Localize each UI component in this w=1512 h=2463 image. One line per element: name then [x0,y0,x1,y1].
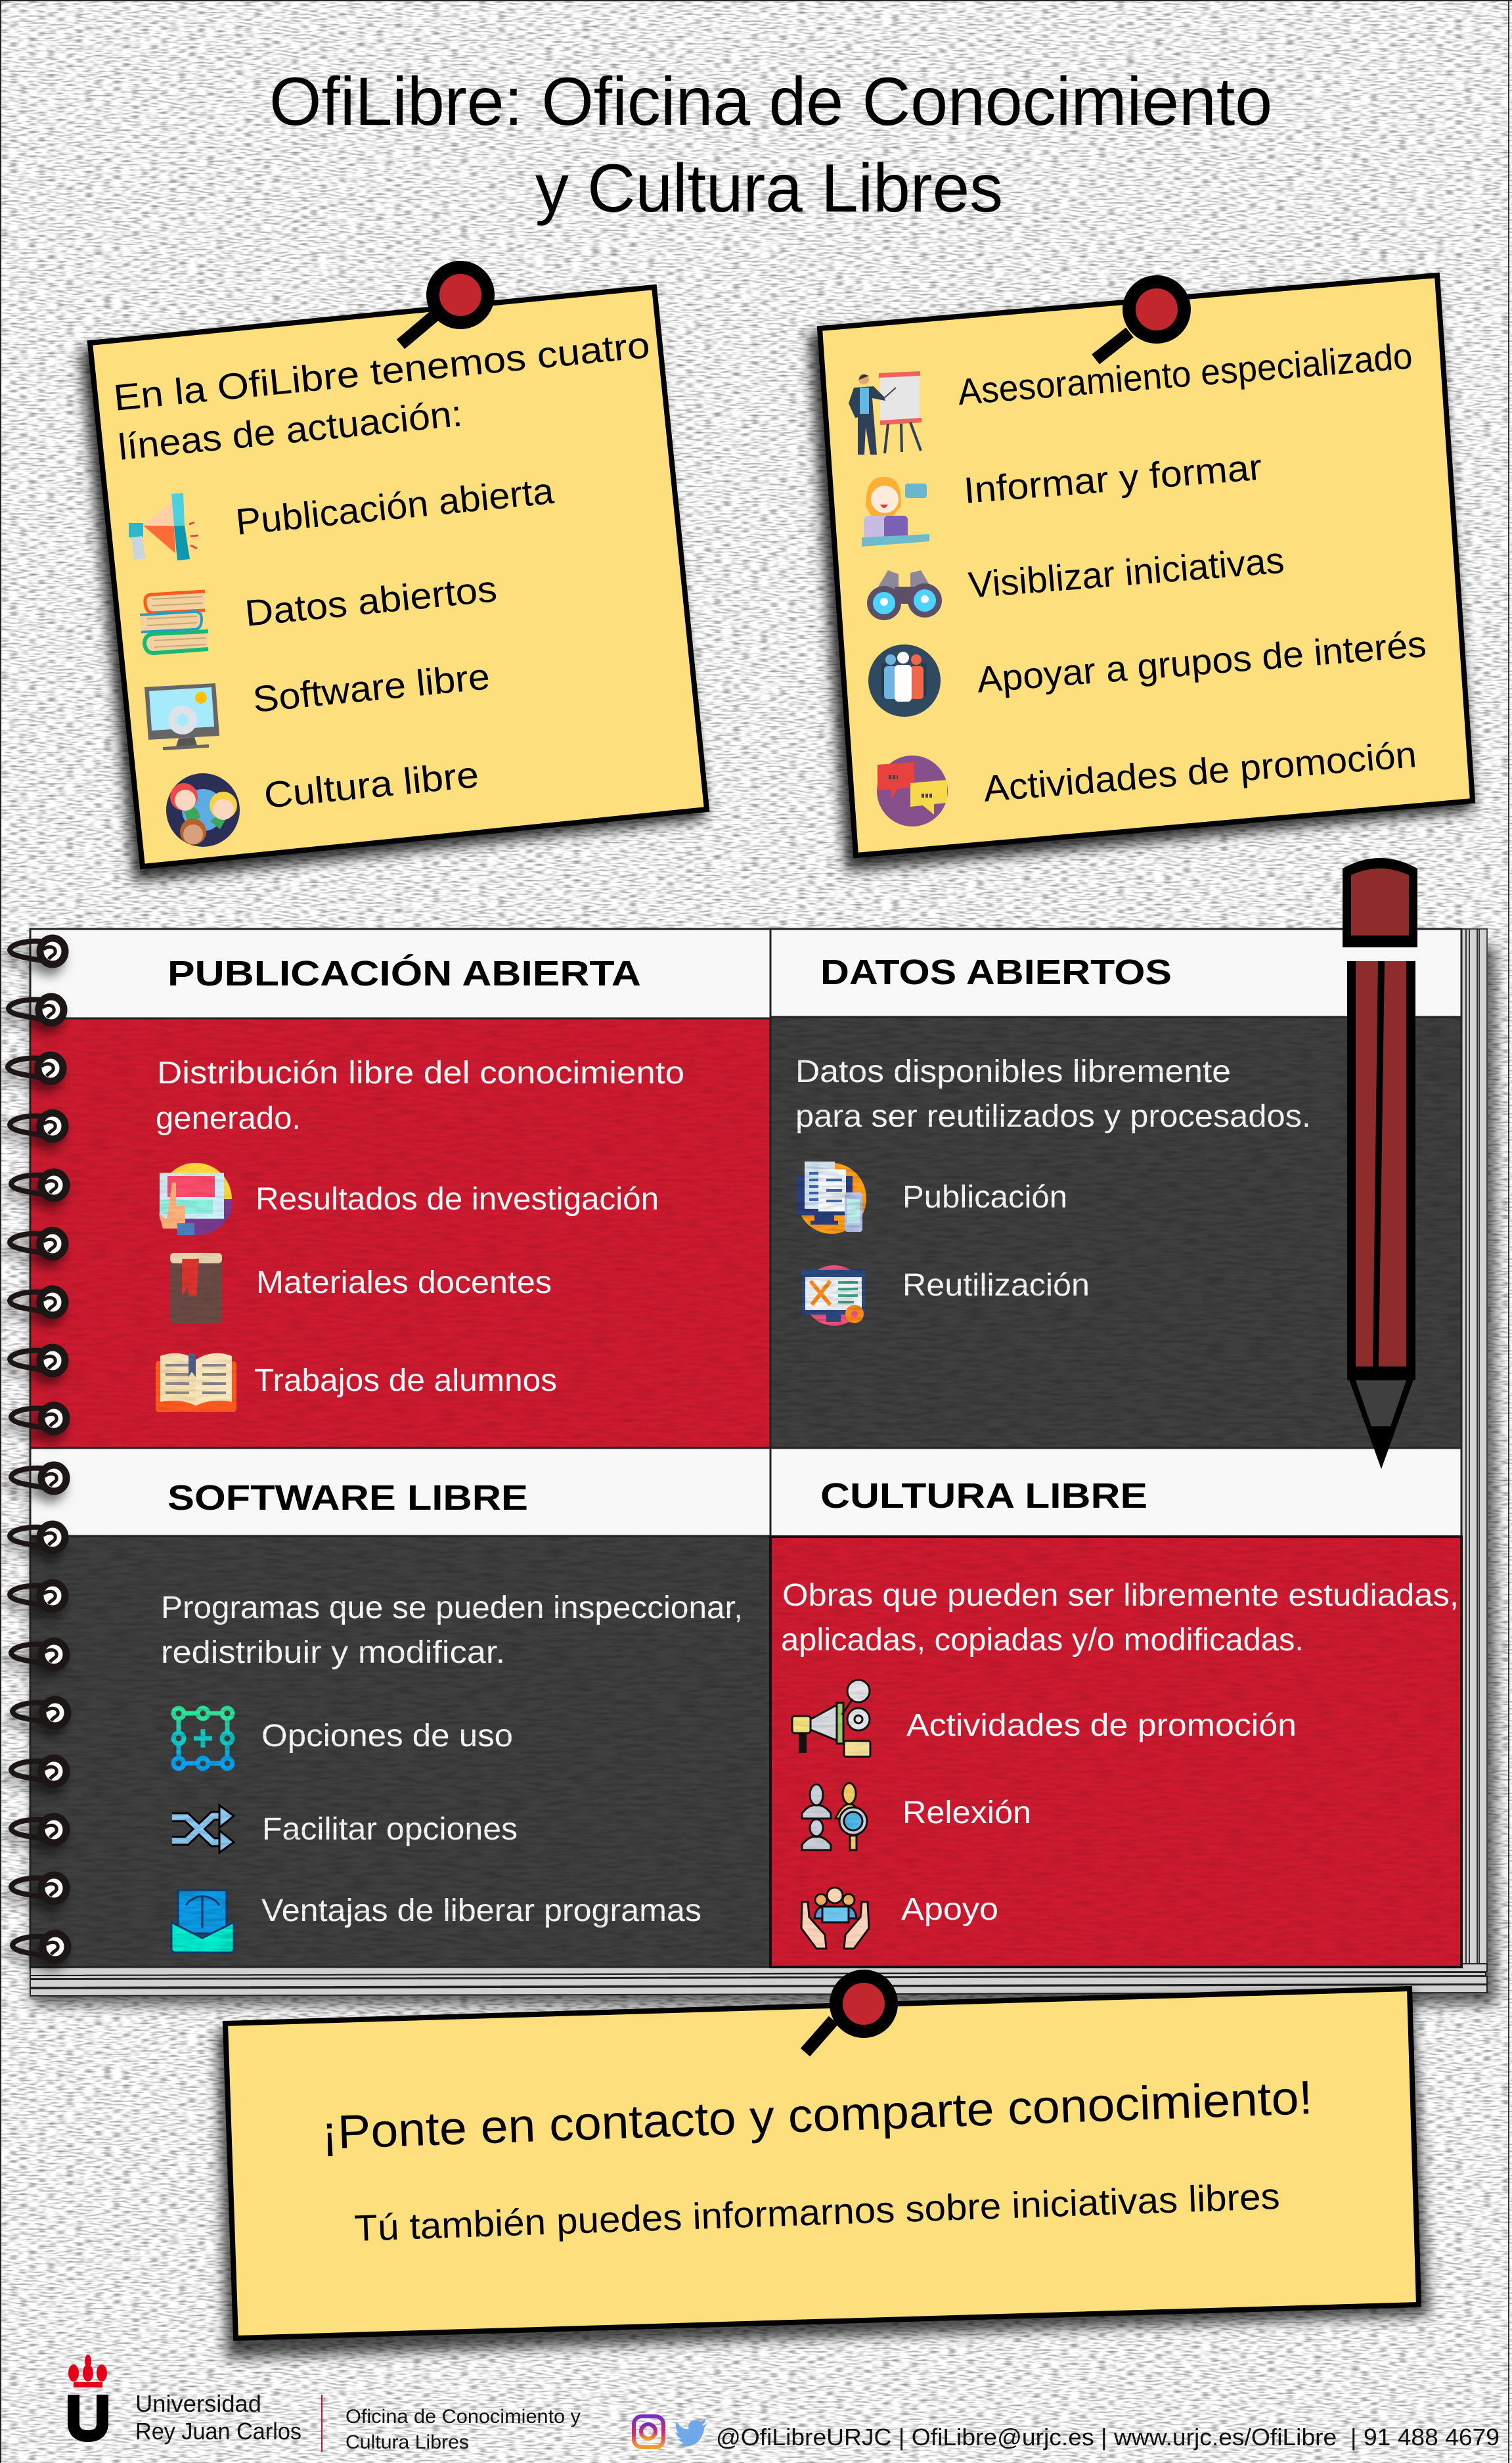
office name [345,2406,581,2453]
panel: datos abiertos [770,929,1461,1448]
note paper [225,1989,1419,2338]
icon: twitter bird [675,2419,708,2447]
note paper [820,275,1473,855]
footer divider [321,2395,322,2452]
text: apoyar: Apoyar a grupos de interés [975,623,1428,700]
text: trabajos: Trabajos de alumnos [254,1363,557,1398]
logo: Universidad Rey Juan Carlos [68,2355,107,2436]
heading: PUBLICACIÓN ABIERTA [167,954,641,993]
icon: research results [159,1163,232,1235]
text: ventajas: Ventajas de liberar programas [261,1893,701,1928]
icon: envelope design [171,1890,234,1953]
description [161,1591,743,1670]
panel: software libre [30,1448,770,1967]
description: aplicadas, copiadas y/o modificadas. [781,1623,1304,1658]
icon: open book [156,1353,236,1412]
description: Distribución libre del conocimiento [157,1056,684,1091]
icon: reuse tools [802,1265,865,1326]
red body [770,1537,1461,1967]
header band [30,1448,770,1536]
description: Programas que se pueden inspeccionar, [161,1591,743,1625]
pin [401,267,488,344]
description: generado. [156,1101,301,1136]
note paper [90,287,707,867]
heading: DATOS ABIERTOS [820,953,1172,992]
icon: people review [802,1783,867,1850]
icon: binoculars [867,570,942,620]
text: informar: Informar y formar [962,446,1263,511]
description [781,1578,1459,1658]
description [156,1056,684,1136]
note: servicios [809,275,1474,871]
intro text: En la OfiLibre tenemos cuatro [112,324,652,418]
red body [30,1018,770,1448]
university name [135,2390,301,2445]
icon: stacked books [140,591,208,653]
text: software libre: Software libre [251,655,491,720]
title: OfiLibre: Oficina de Conocimiento [269,64,1272,140]
description: Datos disponibles libremente [795,1054,1231,1089]
icon: people group [868,644,941,717]
text: asesoramiento: Asesoramiento especializado [956,335,1414,413]
page stack: bottom [30,1964,1487,1996]
icon: promotion megaphone [792,1680,870,1757]
header band [770,929,1461,1017]
text: materiales: Materiales docentes [256,1265,552,1300]
dark body [30,1536,770,1967]
note: líneas de actuación [80,267,707,882]
icon: closed book [170,1253,222,1323]
description: redistribuir y modificar. [161,1635,505,1670]
note shadow [217,1991,1429,2359]
panel: cultura libre [770,1448,1461,1967]
icon: megaphone [129,493,198,560]
intro text [112,324,652,468]
header band [30,929,770,1018]
pencil tip [1347,1374,1415,1469]
text: visiblizar: Visiblizar iniciativas [967,539,1285,606]
icon: children world [166,773,240,847]
note shadow [80,294,705,882]
description: para ser reutilizados y procesados. [795,1099,1311,1134]
icon: shuffle arrows [172,1805,234,1853]
text: cultura libre: Cultura libre [262,754,481,816]
icon: monitor with gear [145,683,219,750]
dark body [770,1017,1461,1448]
subtext: Tú también puedes informarnos sobre iniciativas libres [353,2175,1281,2249]
text: facilitar: Facilitar opciones [262,1812,518,1847]
notebook [8,929,1496,2005]
university name: Universidad [135,2390,261,2417]
text: resultados: Resultados de investigación [256,1182,659,1217]
icon: speaker woman [862,477,929,547]
text: publicación: Publicación [902,1180,1067,1215]
header band [770,1448,1461,1537]
office name: Oficina de Conocimiento y [345,2406,581,2428]
heading: SOFTWARE LIBRE [167,1478,528,1518]
text: apoyo: Apoyo [901,1892,998,1927]
university name: Rey Juan Carlos [135,2418,301,2445]
spiral binding [8,938,68,1960]
title: y Cultura Libres [535,150,1003,227]
text: reflexión: Relexión [902,1796,1031,1830]
icon: instagram [634,2416,663,2447]
icon: chat bubbles [877,756,948,826]
text: opciones: Opciones de uso [261,1719,513,1753]
call to action: ¡Ponte en contacto y comparte conocimiento! [321,2071,1314,2159]
note shadow [809,281,1474,871]
panel texture overlay [30,1018,1461,1966]
page stack: right side [1461,929,1487,1967]
contact line: @OfiLibreURJC | OfiLibre@urjc.es | www.urjc.es/OfiLibre | 91 488 4679 [716,2424,1500,2451]
pencil eraser cap [1343,858,1417,947]
description [795,1054,1311,1134]
notebook shadow [33,946,1496,2005]
text: publicación abierta: Publicación abierta [234,470,556,543]
pin [805,1976,891,2052]
text: actividades: Actividades de promoción [982,733,1418,809]
text: actividades: Actividades de promoción [906,1708,1297,1743]
title [269,64,1272,227]
footer [68,2355,1500,2453]
icon: presenter at board [849,371,922,455]
pencil body [1347,961,1415,1380]
office name: Cultura Libres [345,2431,469,2453]
icon: publication devices [797,1162,866,1234]
note: contacto [217,1976,1429,2359]
pencil [1343,858,1417,1469]
heading: CULTURA LIBRE [820,1476,1147,1516]
icon: supporting hands [801,1887,869,1949]
icon: node rectangle [173,1708,233,1769]
description: Obras que pueden ser libremente estudiadas, [782,1578,1459,1613]
text: reutilización: Reutilización [902,1268,1090,1303]
text: datos abiertos: Datos abiertos [243,568,499,634]
intro text: líneas de actuación: [116,392,464,468]
pin [1096,282,1184,359]
panel: publicación abierta [30,929,770,1448]
